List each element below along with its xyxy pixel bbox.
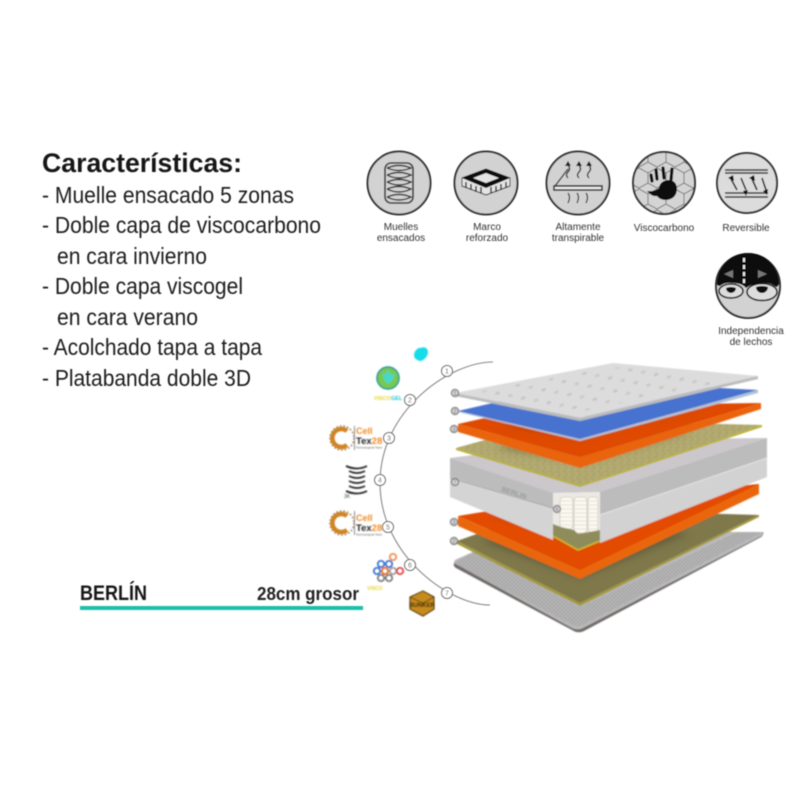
icon: Bunker box: BUNKER: [409, 603, 435, 609]
marker 3: 3: [387, 436, 391, 442]
layer marker: springs: [554, 506, 560, 513]
layer: orange foam upper: [458, 399, 761, 468]
icon: CellTex28 lower: [330, 511, 383, 536]
icon: reinforced frame: [454, 152, 518, 214]
icon: CellTex28 lower: Cell: [356, 513, 373, 523]
label: Muelles ensacados: Muelles: [384, 222, 418, 233]
icon: CellTex28 upper: Cell: [356, 426, 373, 436]
underline: [80, 606, 363, 610]
layer: olive foam lower: [457, 509, 759, 606]
icon: reversible: [717, 153, 777, 213]
icon: visco hexagons: [367, 554, 403, 592]
layer marker: springs: 6: [556, 507, 559, 513]
marker 1: 1: [445, 368, 449, 376]
label: Altamente transpirable: Altamente: [555, 222, 601, 233]
label: Reversible: Reversible: [722, 223, 770, 234]
feature 2 continuation: en cara invierno: [57, 243, 207, 269]
feature 5: - Platabanda doble 3D: [42, 365, 251, 391]
layer marker: top cover: [452, 390, 458, 397]
icon: Bunker box: [409, 591, 435, 616]
thickness: 28cm grosor: [257, 584, 359, 604]
icon: spring: 3K: [344, 494, 351, 500]
icon: pocket springs: [368, 152, 430, 214]
icon: breathable: [546, 152, 610, 214]
heading: Características:: [42, 148, 242, 178]
layer marker: core: 7: [454, 480, 457, 486]
layer: quilted top cover: [455, 363, 758, 421]
marker 6: [404, 560, 416, 570]
layer marker: orange lower: [450, 518, 458, 526]
spring cut-away: [560, 497, 598, 533]
label: viscogel: VISCOGEL: [374, 396, 403, 402]
icon row: features: [368, 152, 784, 348]
callout: model name and thickness: [80, 582, 363, 610]
marker 4: 4: [378, 478, 382, 484]
diagram: numbered arc: [374, 362, 493, 605]
icon: cyan heart: [414, 347, 428, 361]
icon: CellTex28 lower: Technological Team: [356, 532, 383, 536]
icon: visco hexagons: VISCO: [367, 586, 383, 592]
icon: CellTex28 upper: [330, 426, 383, 450]
layer: mattress core: [450, 438, 767, 550]
layer marker: blue: [452, 408, 458, 415]
layer marker: orange upper: [450, 426, 458, 433]
feature 3 continuation: en cara verano: [57, 304, 198, 330]
icon: viscocarbon hand: [633, 152, 695, 214]
diagram: technology icons: [330, 347, 435, 616]
marker 1: [442, 366, 452, 376]
marker 2: 2: [408, 398, 412, 404]
model name: BERLÍN: [80, 582, 147, 605]
icon: spring: [344, 466, 367, 500]
marker 5: [382, 522, 394, 532]
layer marker: orange upper: 3: [453, 427, 456, 433]
label: Muelles ensacados: ensacados: [377, 233, 425, 244]
markers on layers: [450, 390, 560, 545]
marker 6: 6: [408, 562, 412, 570]
label: Independencia de lechos: de lechos: [730, 337, 772, 348]
label: Independencia de lechos: Independencia: [718, 326, 784, 337]
layer marker: top cover: 1: [454, 391, 457, 397]
feature 2: - Doble capa de viscocarbono: [42, 212, 321, 238]
feature 1: - Muelle ensacado 5 zonas: [42, 182, 294, 208]
icon: viscogel globe: [377, 367, 399, 389]
layer: bottom cover: [454, 512, 763, 632]
marker 5: 5: [386, 524, 390, 532]
layer: green foam upper: [456, 420, 762, 487]
diagram: exploded mattress: [450, 363, 767, 632]
marker 4: [374, 474, 386, 486]
marker 2: [404, 394, 416, 406]
icon: CellTex28 upper: Tex28: [356, 436, 382, 447]
layer marker: blue: 2: [454, 409, 457, 415]
marker 3: [384, 432, 394, 444]
icon: independent sleep: [716, 253, 780, 318]
icon: CellTex28 upper: Technological Team: [356, 446, 383, 450]
icon: CellTex28 lower: Tex28: [356, 523, 382, 534]
label: Viscocarbono: Viscocarbono: [634, 223, 695, 234]
feature 4: - Acolchado tapa a tapa: [42, 334, 263, 360]
feature 3: - Doble capa viscogel: [42, 273, 243, 299]
layer: blue viscogel: [458, 381, 758, 441]
core side label: BERLIN: [500, 486, 527, 501]
label: Marco reforzado: Marco: [473, 222, 501, 233]
label: Marco reforzado: reforzado: [466, 233, 509, 244]
layer: orange foam lower: [458, 484, 759, 579]
marker 7: 7: [445, 590, 449, 598]
text block: features: [42, 148, 321, 391]
layer marker: olive: 2: [453, 539, 456, 545]
layer marker: orange lower: 3: [453, 520, 456, 526]
layer marker: olive: [450, 538, 458, 545]
label: Altamente transpirable: transpirable: [552, 233, 605, 244]
layer marker: core: [452, 478, 458, 486]
marker 7: [442, 588, 452, 598]
